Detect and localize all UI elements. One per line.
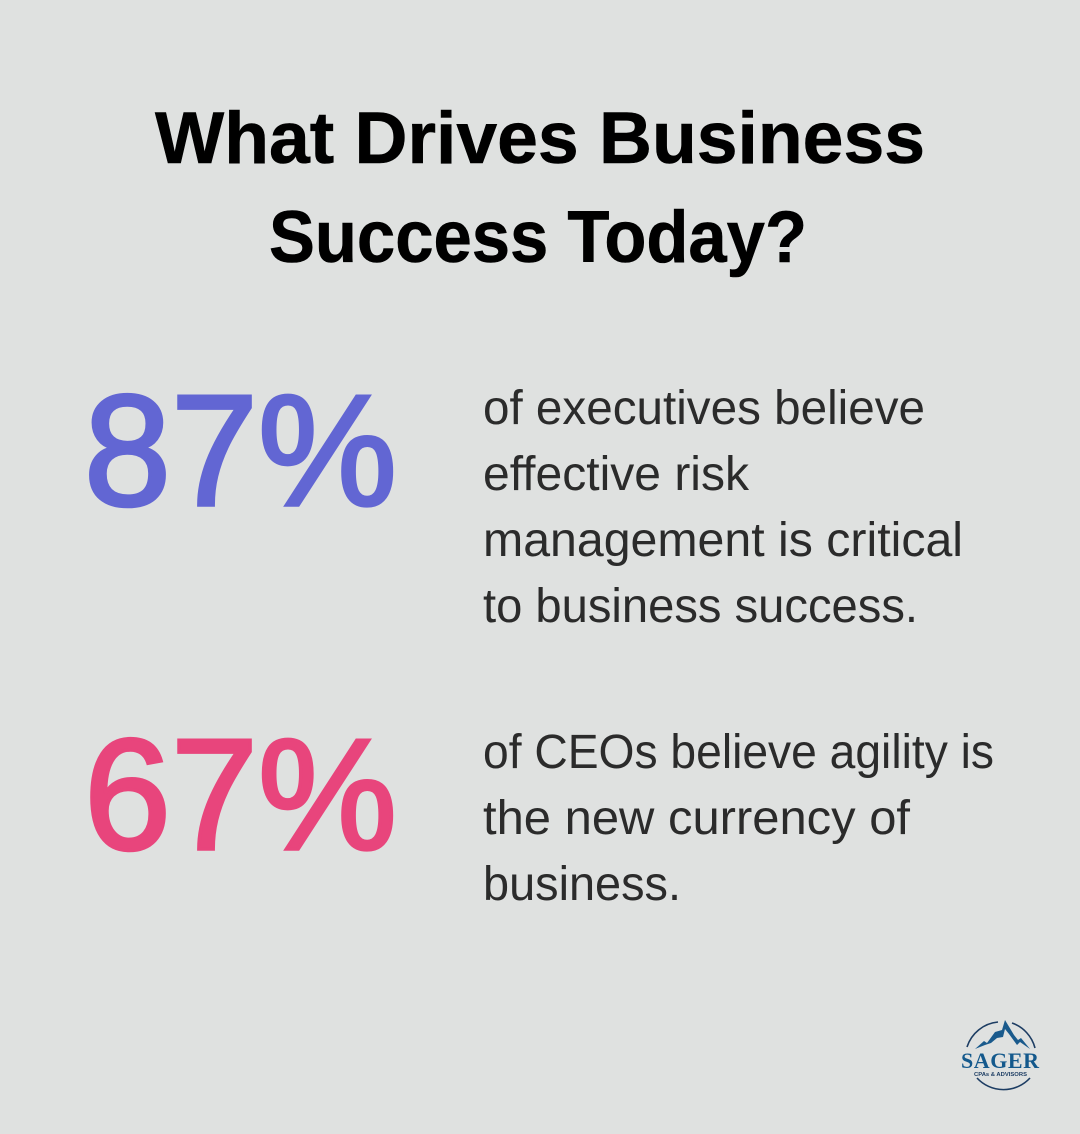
logo wordmark: SAGER	[961, 1048, 1040, 1073]
stat: 67%: 67%	[84, 707, 397, 883]
text: risk management description: effective risk	[483, 448, 750, 501]
title: Success Today?	[269, 197, 807, 278]
text: agility description: of CEOs believe agility is	[483, 726, 994, 779]
logo mountains	[975, 1020, 1030, 1049]
text: agility description: business.	[483, 858, 681, 911]
text: agility description: the new currency of	[483, 792, 911, 845]
stat: 87%: 87%	[84, 363, 397, 539]
text: risk management description: to business success.	[483, 580, 918, 633]
title	[155, 98, 925, 278]
title: What Drives Business	[155, 98, 925, 179]
logo tagline: CPAs & ADVISORS	[974, 1072, 1027, 1078]
logo: Sager CPAs & Advisors	[961, 1020, 1040, 1090]
logo ring	[967, 1022, 1035, 1090]
text: risk management description: of executives believe	[483, 382, 925, 435]
text: risk management description: management is critical	[483, 514, 963, 567]
text: risk management description	[483, 382, 963, 633]
text: agility description	[483, 726, 994, 911]
